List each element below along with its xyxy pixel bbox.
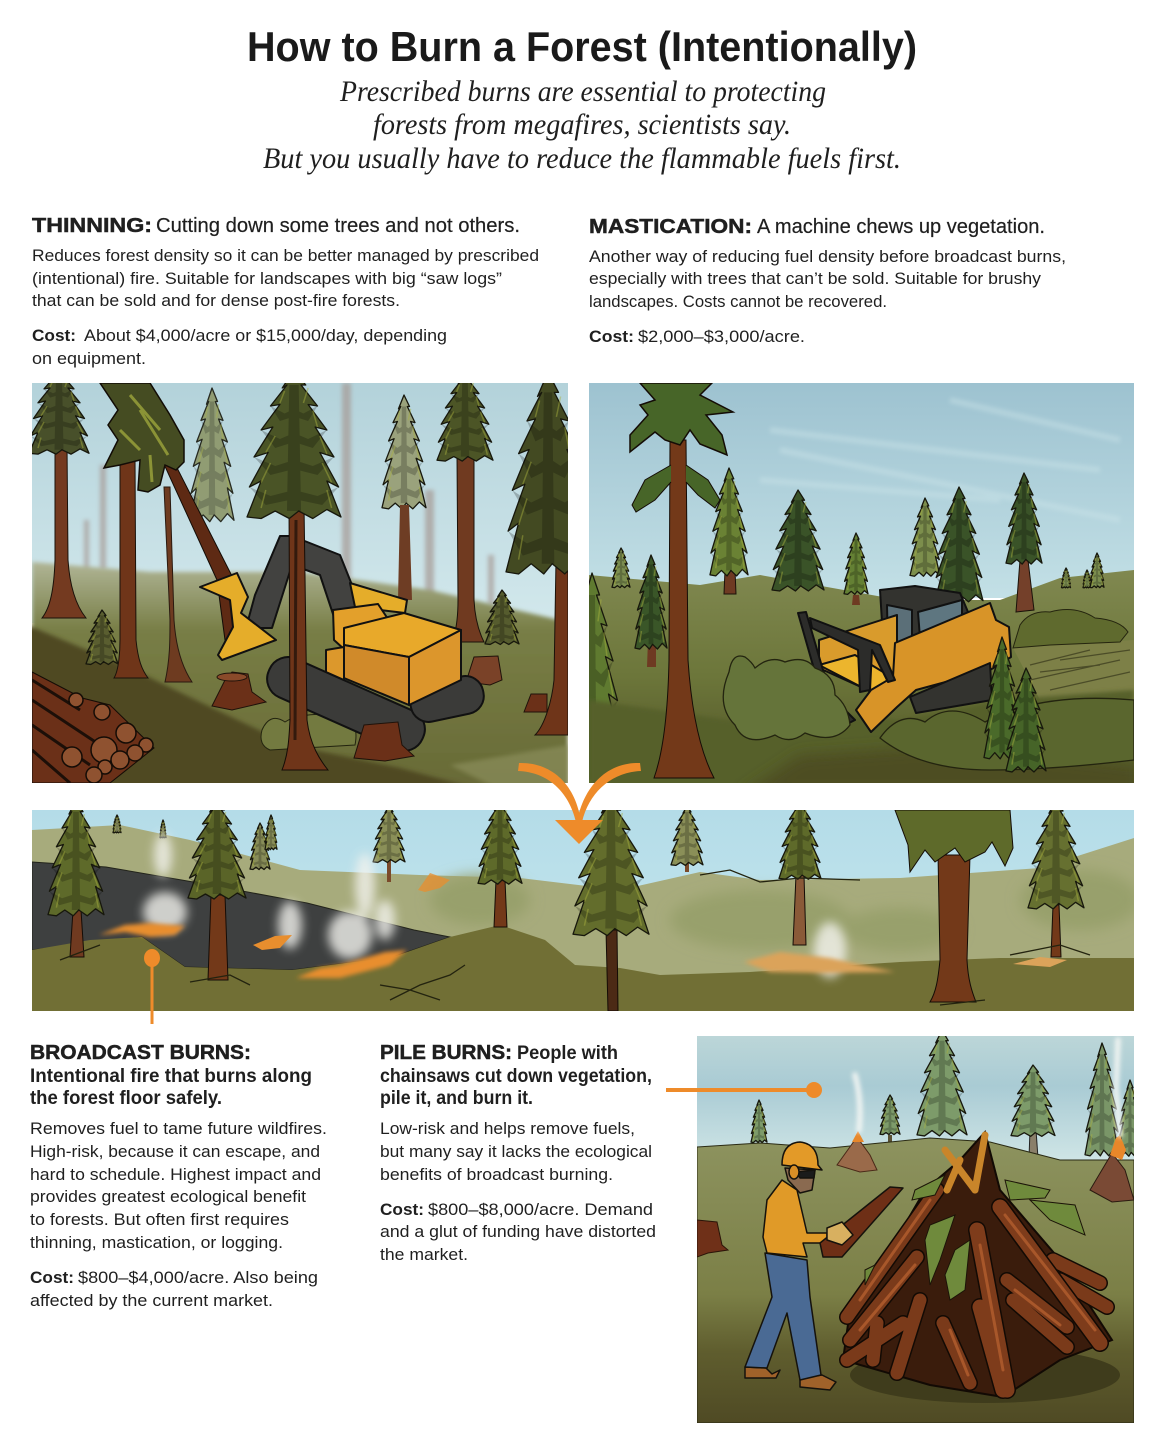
text block: pile burns: pile it, and burn it. (380, 1087, 533, 1109)
text block: pile burns: $800–$8,000/acre. Demand (428, 1200, 653, 1219)
forest trees (48, 796, 1084, 1011)
small burning piles (837, 1131, 1134, 1202)
ground cracks (60, 870, 1090, 1005)
ground (697, 1138, 1134, 1423)
stumps (212, 656, 547, 712)
title: How to Burn a Forest (Intentionally) (247, 23, 917, 70)
text block: pile burns: and a glut of funding have distorted (380, 1222, 656, 1241)
text block: broadcast burns: Intentional fire that burns along (30, 1065, 312, 1087)
person with log (745, 1142, 903, 1390)
subtitle: But you usually have to reduce the flammable fuels first. (263, 142, 901, 175)
text block: broadcast burns (30, 1042, 327, 1310)
foreground dark ground (589, 690, 1134, 790)
subtitle: Prescribed burns are essential to protecting (339, 75, 826, 108)
text block: broadcast burns: hard to schedule. Highest impact and (30, 1165, 321, 1184)
text block: thinning: (intentional) fire. Suitable for landscapes with big “saw logs” (32, 269, 502, 288)
callout marker: broadcast burn (144, 949, 160, 1024)
text block: broadcast burns: thinning, mastication, or logging. (30, 1233, 283, 1252)
text block: mastication: Cost: (589, 327, 634, 346)
callout marker: pile burn (666, 1082, 822, 1098)
subtitle (263, 75, 901, 175)
text block: thinning: Cost: (32, 326, 76, 345)
smoke (143, 833, 846, 978)
foreground grass (32, 925, 1134, 1011)
back hills (589, 570, 1134, 783)
text block: pile burns: People with (517, 1042, 618, 1064)
front trees (984, 637, 1046, 772)
text block: pile burns: chainsaws cut down vegetation, (380, 1065, 652, 1087)
text block: pile burns: Low-risk and helps remove fuels, (380, 1119, 635, 1138)
smoke columns (855, 1040, 1120, 1135)
text block: pile burns (380, 1042, 656, 1264)
text block: broadcast burns: Removes fuel to tame future wildfires. (30, 1119, 327, 1138)
text block: thinning: on equipment. (32, 349, 146, 368)
text block: thinning: that can be sold and for dense post-fire forests. (32, 291, 400, 310)
background trees (86, 388, 519, 682)
text block: mastication: A machine chews up vegetation. (757, 216, 1045, 238)
front stump (354, 722, 414, 761)
text block: thinning (32, 215, 539, 368)
text block: pile burns: the market. (380, 1245, 468, 1264)
panel: broadcast burn illustration (32, 796, 1140, 1011)
text block: mastication: Another way of reducing fuel density before broadcast burns, (589, 247, 1066, 266)
log pile (32, 672, 154, 783)
panel: mastication illustration (562, 383, 1140, 795)
text block: broadcast burns: BROADCAST BURNS: (30, 1042, 251, 1064)
text block: pile burns: but many say it lacks the ecological (380, 1142, 652, 1161)
chewed ground (1013, 610, 1134, 700)
dark slope (32, 624, 460, 783)
brush pile (843, 1132, 1112, 1397)
flames (99, 873, 1067, 978)
ghost trunks (84, 383, 494, 605)
background ground (32, 562, 568, 790)
skid steer machine (798, 586, 1011, 732)
text block: broadcast burns: provides greatest ecological benefit (30, 1187, 306, 1206)
text block: mastication: $2,000–$3,000/acre. (638, 327, 805, 346)
text block: broadcast burns: the forest floor safely. (30, 1087, 222, 1109)
text block: pile burns: PILE BURNS: (380, 1042, 512, 1064)
tall foreground tree (630, 383, 733, 778)
mulch mounds (723, 656, 1134, 770)
text block: broadcast burns: affected by the current market. (30, 1291, 273, 1310)
text block: broadcast burns: $800–$4,000/acre. Also being (78, 1268, 318, 1287)
panel: pile burn illustration (697, 1030, 1142, 1423)
tree with trunk and leaning tree (100, 383, 241, 678)
text block: thinning: About $4,000/acre or $15,000/day, depending (84, 326, 447, 345)
text block: pile burns: benefits of broadcast burning. (380, 1165, 613, 1184)
feller buncher machine (200, 536, 487, 757)
text block: thinning: THINNING: (32, 215, 152, 237)
text block: broadcast burns: to forests. But often first requires (30, 1210, 289, 1229)
pale hills (32, 825, 1134, 975)
text block: mastication: especially with trees that can’t be sold. Suitable for brushy (589, 269, 1042, 288)
background trees (751, 1030, 1142, 1158)
back trees (612, 468, 1104, 667)
text block: broadcast burns: Cost: (30, 1268, 74, 1287)
text block: mastication: landscapes. Costs cannot be recovered. (589, 292, 887, 311)
pile shadow (850, 1354, 1120, 1403)
edge tree (589, 572, 618, 783)
arrow: merge to broadcast burn (518, 763, 641, 844)
panel: thinning illustration (32, 383, 568, 783)
pale back trees (113, 806, 703, 882)
text block: thinning: Cutting down some trees and not others. (156, 215, 520, 237)
text block: mastication: MASTICATION: (589, 216, 752, 238)
bushes (261, 714, 356, 750)
text block: mastication (589, 216, 1066, 346)
tree left (29, 368, 89, 618)
burned area (32, 862, 450, 970)
stump (697, 1220, 728, 1257)
text block: thinning: Reduces forest density so it can be better managed by prescribed (32, 246, 539, 265)
subtitle: forests from megafires, scientists say. (373, 108, 791, 141)
center tree (247, 370, 341, 770)
center-right trees (436, 383, 568, 736)
text block: pile burns: Cost: (380, 1200, 424, 1219)
text block: broadcast burns: High-risk, because it can escape, and (30, 1142, 320, 1161)
